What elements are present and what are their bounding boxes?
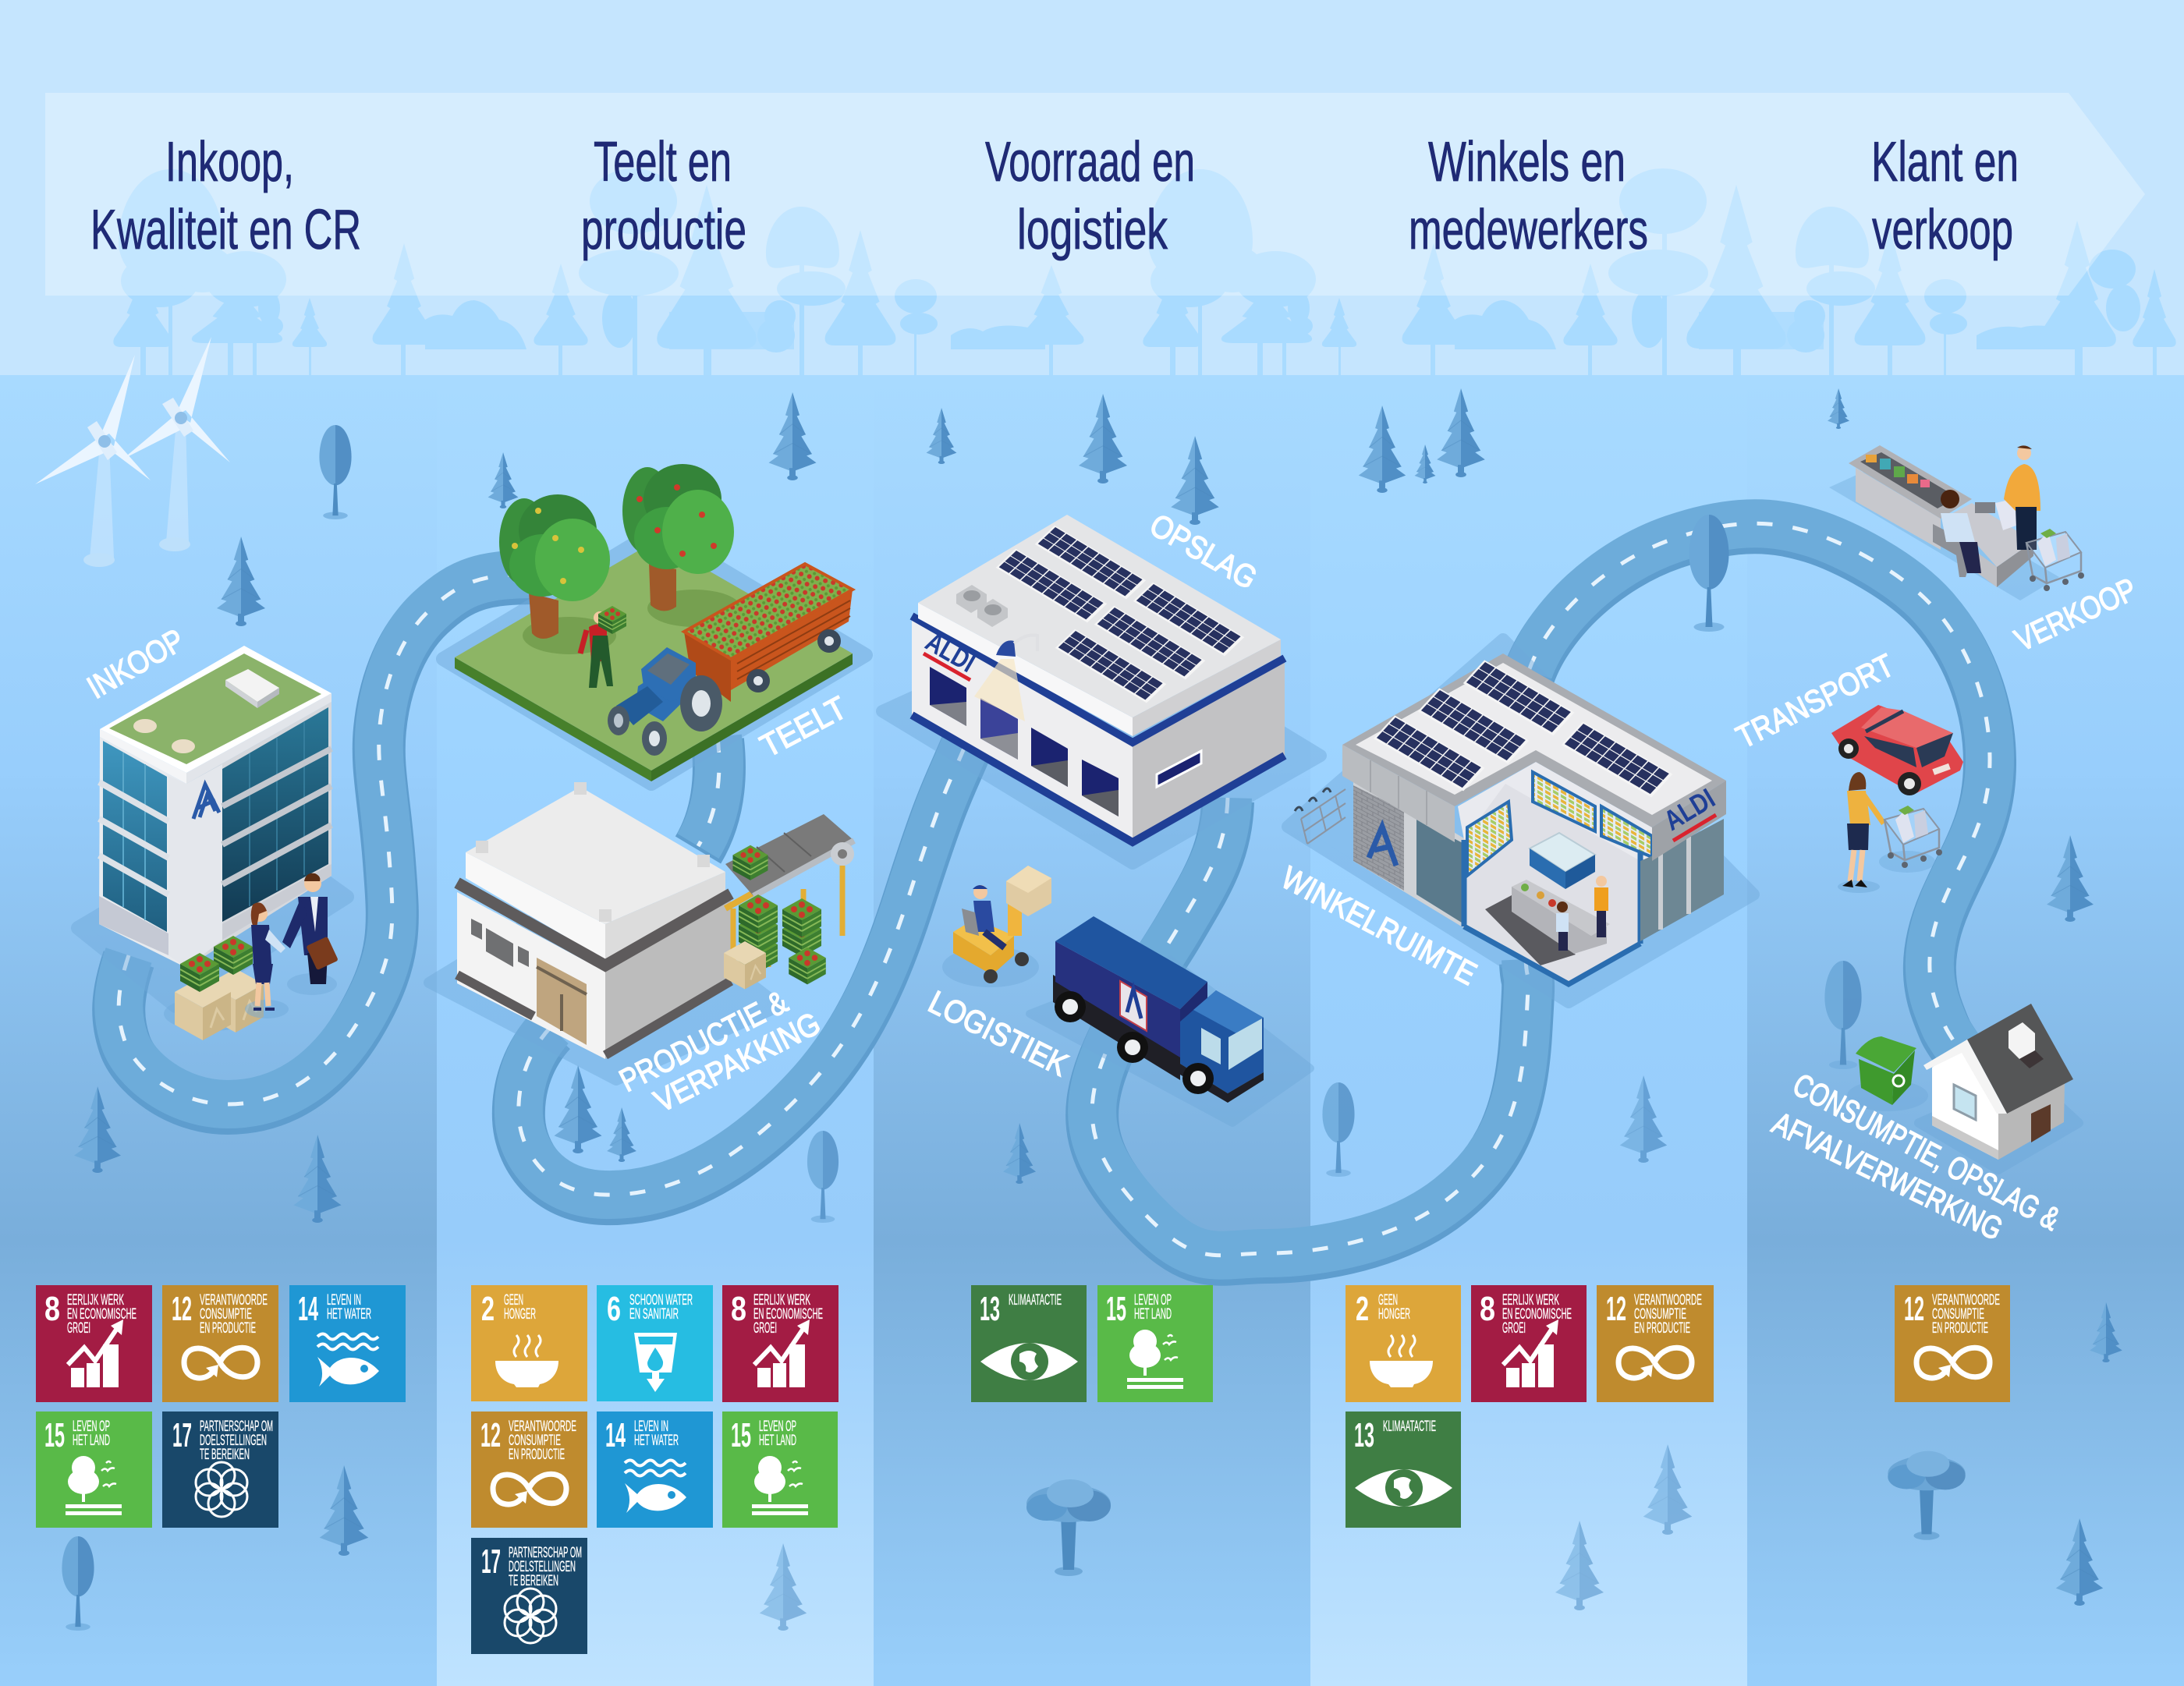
SDG 8: EN ECONOMISCHE <box>1502 1306 1572 1323</box>
SDG 8: EN ECONOMISCHE <box>67 1306 136 1323</box>
illustration: delivery truck <box>1030 916 1310 1123</box>
road: surface <box>119 523 1990 1256</box>
SDG 2: 2 <box>1356 1290 1369 1328</box>
SDG 15: 15 <box>731 1416 751 1454</box>
SDG 2: HONGER <box>504 1306 536 1323</box>
SDG 13: KLIMAATACTIE <box>1383 1419 1436 1435</box>
SDG 8 <box>36 1285 152 1402</box>
SDG 8: 8 <box>731 1290 746 1328</box>
SDG 15: HET LAND <box>73 1433 110 1449</box>
AC units <box>956 585 1008 627</box>
SDG 15 <box>1097 1285 1213 1402</box>
heading: Winkels en medewerkers <box>1409 131 1648 261</box>
SDG 12: 12 <box>480 1416 501 1454</box>
label: LOGISTIEK: LOGISTIEK <box>923 983 1074 1083</box>
SDG 6 <box>597 1285 713 1401</box>
heading: Klant en verkoop <box>1871 131 2019 261</box>
SDG 15: LEVEN OP <box>73 1419 110 1435</box>
SDG 8: EERLIJK WERK <box>67 1292 124 1309</box>
SDG 17: TE BEREIKEN <box>509 1573 558 1589</box>
SDG 12 <box>1895 1285 2010 1402</box>
header arrow band <box>45 93 2145 296</box>
illustration: orchard plot with trees <box>443 464 866 784</box>
SDG 2: GEEN <box>1378 1292 1398 1309</box>
illustration: production building <box>429 782 780 1080</box>
label: VERKOOP: VERKOOP <box>2009 571 2142 658</box>
SDG tiles: Klant en verkoop <box>1895 1285 2010 1402</box>
SDG 13: 13 <box>980 1290 1000 1328</box>
label: TRANSPORT: TRANSPORT <box>1731 647 1899 755</box>
SDG tiles: Winkels en medewerkers <box>1346 1285 1714 1528</box>
SDG 13 <box>971 1285 1087 1402</box>
SDG 12: EN PRODUCTIE <box>509 1447 565 1463</box>
label: INKOOP: INKOOP <box>81 622 190 706</box>
SDG 12: CONSUMPTIE <box>1634 1306 1686 1323</box>
SDG 15: LEVEN OP <box>759 1419 796 1435</box>
heading: Voorraad en logistiek <box>985 131 1195 261</box>
label: TEELT: TEELT <box>754 689 853 764</box>
label: PRODUCTIE & VERPAKKING: PRODUCTIE & <box>614 983 793 1099</box>
SDG 14: HET WATER <box>634 1433 679 1449</box>
heading: Inkoop, Kwaliteit en CR: Inkoop, <box>165 131 294 193</box>
freezer <box>1530 833 1595 889</box>
road: dashes <box>119 523 1990 1256</box>
SDG 17: TE BEREIKEN <box>200 1447 250 1463</box>
loading docks <box>930 667 1119 816</box>
shopping carts at store entrance <box>1295 788 1346 844</box>
SDG 12 <box>162 1285 278 1402</box>
conifers in front of the road <box>554 515 1728 1162</box>
illustration: ALDI store <box>1288 639 1753 1002</box>
SDG 15: 15 <box>44 1416 65 1454</box>
sign: ALDI on warehouse: ALDI <box>920 625 981 678</box>
ground columns <box>0 375 2184 1686</box>
SDG 8: 8 <box>1480 1290 1495 1328</box>
SDG 12: VERANTWOORDE <box>509 1419 576 1435</box>
SDG 8: GROEI <box>67 1320 90 1337</box>
SDG 14: LEVEN IN <box>327 1292 361 1309</box>
tree line silhouette <box>113 168 2176 375</box>
SDG 12: CONSUMPTIE <box>1932 1306 1984 1323</box>
SDG 14 <box>289 1285 406 1402</box>
SDG 15: HET LAND <box>759 1433 796 1449</box>
SDG 17: PARTNERSCHAP OM <box>509 1545 582 1561</box>
figure: farmer carrying crate <box>580 606 626 688</box>
counter belt <box>1849 445 1972 550</box>
road: casing <box>119 527 1990 1259</box>
figures: woman and man shaking hands <box>245 873 339 1018</box>
label: CONSUMPTIE, OPSLAG & AFVALVERWERKING: CONSUMPTIE, OPSLAG & <box>1787 1066 2066 1238</box>
SDG 17 <box>162 1411 278 1528</box>
column headings <box>90 131 2019 261</box>
label: CONSUMPTIE, OPSLAG & AFVALVERWERKING: AFVALVERWERKING <box>1767 1105 2008 1247</box>
SDG 8: EERLIJK WERK <box>753 1292 810 1309</box>
SDG 17 <box>471 1538 587 1654</box>
illustration: tractor and trailer <box>608 564 853 756</box>
SDG tiles: Voorraad en logistiek <box>971 1285 1213 1402</box>
SDG 15: HET LAND <box>1134 1306 1172 1323</box>
SDG 8 <box>722 1285 838 1402</box>
SDG 2: 2 <box>481 1290 495 1328</box>
store shelves <box>1467 772 1652 876</box>
heading: Teelt en productie <box>581 131 746 261</box>
heading: Voorraad en logistiek: logistiek <box>1017 199 1168 261</box>
solar panels on store <box>1374 660 1673 797</box>
illustration: recycling bin <box>1847 1036 1928 1111</box>
SDG 13: 13 <box>1354 1416 1374 1454</box>
SDG 14 <box>597 1411 713 1528</box>
label: OPSLAG: OPSLAG <box>1144 507 1263 596</box>
illustration: checkout counter with cashier and customer <box>1829 445 2084 600</box>
heading: Voorraad en logistiek: Voorraad en <box>985 131 1195 193</box>
illustration: forklift <box>942 866 1051 987</box>
SDG 12: VERANTWOORDE <box>200 1292 268 1309</box>
illustration: office building <box>78 646 347 1006</box>
decorative trees <box>62 388 2122 1631</box>
label: PRODUCTIE & VERPAKKING: VERPAKKING <box>648 1005 826 1119</box>
SDG 13: KLIMAATACTIE <box>1009 1292 1062 1309</box>
heading: Winkels en medewerkers: medewerkers <box>1409 199 1648 261</box>
SDG 12: VERANTWOORDE <box>1932 1292 2000 1309</box>
SDG 17: 17 <box>481 1543 501 1581</box>
figure: woman with shopping cart <box>1838 772 1942 893</box>
cashier and customer in store <box>1556 876 1608 951</box>
icon: A logo <box>193 785 219 819</box>
illustration: house <box>1919 1004 2079 1170</box>
SDG 8: GROEI <box>1502 1320 1526 1337</box>
SDG 17: DOELSTELLINGEN <box>200 1433 267 1449</box>
label: CONSUMPTIE, OPSLAG & AFVALVERWERKING <box>1767 1066 2066 1247</box>
illustration: conveyor with crates <box>724 814 854 989</box>
SDG 12 <box>471 1411 587 1528</box>
SDG 2: HONGER <box>1378 1306 1410 1323</box>
SDG 17: 17 <box>172 1416 192 1454</box>
heading: Inkoop, Kwaliteit en CR <box>90 131 361 261</box>
SDG 15 <box>722 1411 838 1528</box>
SDG 8: GROEI <box>753 1320 777 1337</box>
illustration: crates and boxes at office <box>164 936 264 1040</box>
illustration: red car <box>1831 705 1963 795</box>
SDG 17: DOELSTELLINGEN <box>509 1559 576 1575</box>
icon: wind turbines <box>35 337 230 567</box>
SDG 15: LEVEN OP <box>1134 1292 1172 1309</box>
SDG 8: 8 <box>44 1290 60 1328</box>
heading: Teelt en productie: productie <box>581 199 746 261</box>
SDG 14: 14 <box>605 1416 626 1454</box>
SDG 12: EN PRODUCTIE <box>1932 1320 1988 1337</box>
SDG 15 <box>36 1411 152 1528</box>
SDG 8: EERLIJK WERK <box>1502 1292 1559 1309</box>
checkout desk <box>1950 502 2033 587</box>
SDG tiles: Inkoop <box>36 1285 406 1528</box>
SDG 12: EN PRODUCTIE <box>200 1320 256 1337</box>
SDG 12: EN PRODUCTIE <box>1634 1320 1690 1337</box>
cashier <box>1933 490 1981 577</box>
SDG 12: 12 <box>1904 1290 1924 1328</box>
SDG 2 <box>1346 1285 1461 1402</box>
SDG 14: 14 <box>298 1290 318 1328</box>
SDG 6: 6 <box>607 1290 621 1328</box>
SDG 2: GEEN <box>504 1292 523 1309</box>
label: WINKELRUIMTE: WINKELRUIMTE <box>1275 859 1483 992</box>
heading: Klant en verkoop: verkoop <box>1872 199 2013 261</box>
road network <box>119 523 1990 1259</box>
SDG 6: SCHOON WATER <box>629 1292 693 1309</box>
SDG 14: HET WATER <box>327 1306 371 1323</box>
SDG 14: LEVEN IN <box>634 1419 668 1435</box>
SDG 17: PARTNERSCHAP OM <box>200 1419 273 1435</box>
sign: ALDI on store: ALDI <box>1658 782 1720 837</box>
SDG 15: 15 <box>1106 1290 1126 1328</box>
SDG 6: EN SANITAIR <box>629 1306 679 1323</box>
sky background <box>0 0 2184 375</box>
SDG 12: CONSUMPTIE <box>200 1306 252 1323</box>
SDG 13 <box>1346 1411 1461 1528</box>
SDG 2 <box>471 1285 587 1401</box>
SDG 12: 12 <box>1606 1290 1626 1328</box>
SDG 12 <box>1597 1285 1714 1402</box>
SDG 8: EN ECONOMISCHE <box>753 1306 823 1323</box>
SDG 12: CONSUMPTIE <box>509 1433 561 1449</box>
illustration: warehouse <box>882 515 1321 863</box>
heading: Teelt en productie: Teelt en <box>594 131 732 193</box>
heading: Winkels en medewerkers: Winkels en <box>1428 131 1626 193</box>
SDG 12: VERANTWOORDE <box>1634 1292 1702 1309</box>
heading: Klant en verkoop: Klant en <box>1871 131 2019 193</box>
SDG tiles: Teelt en productie <box>471 1285 838 1654</box>
SDG 12: 12 <box>172 1290 192 1328</box>
SDG 8 <box>1471 1285 1587 1402</box>
heading: Inkoop, Kwaliteit en CR: Kwaliteit en CR <box>90 199 361 261</box>
solar panels on warehouse <box>996 526 1244 703</box>
